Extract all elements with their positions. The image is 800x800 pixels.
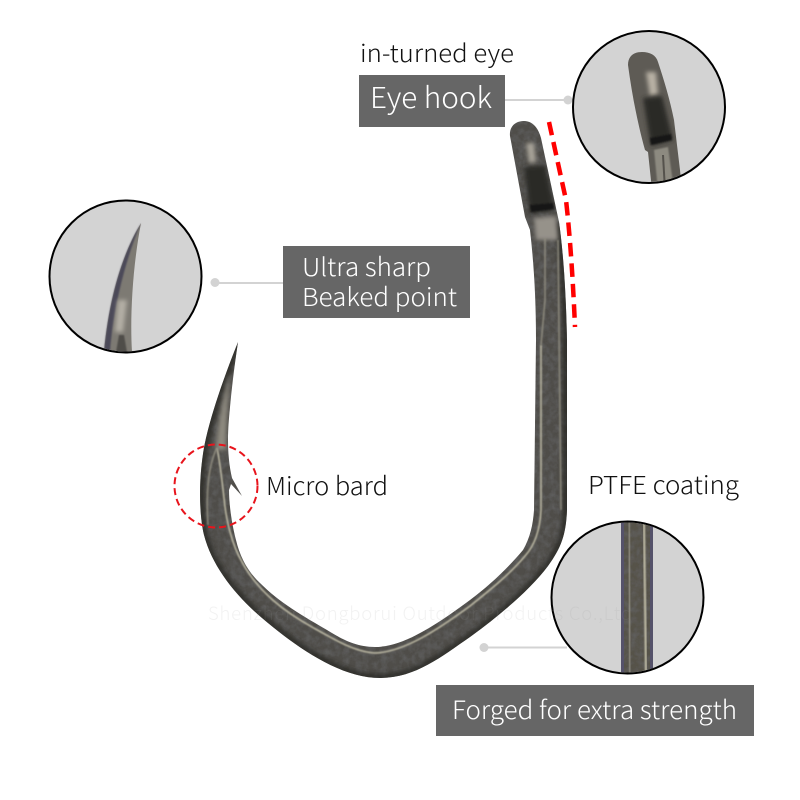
red dashed line: in-turned eye curve [549,122,575,327]
label box: Eye hook [359,75,505,127]
label: Micro bard: Micro bard [266,467,388,503]
hook outer shading [200,222,567,678]
label box: Eye hook: Eye hook [370,75,492,117]
label box: Ultra sharp Beaked point [283,246,470,318]
hook forged highlights [217,345,541,653]
connector: eye hook [505,96,572,104]
label box: Ultra sharp Beaked point: Ultra sharp [302,248,431,284]
hook eye shading [524,165,555,214]
label box: Forged for extra strength: Forged for extra strength [452,690,737,727]
magnifier: point [50,200,202,352]
label: PTFE coating: PTFE coating [588,466,739,502]
magnifier: coating [552,520,704,676]
hook illustration [190,115,575,685]
connector: beaked point [210,278,283,287]
label box: Forged for extra strength [436,685,754,736]
magnifier: eye [573,31,725,190]
red dashed circle: micro barb [174,444,258,528]
watermark: Shenzhen Dongborui Outdoor Products Co.,Ltd [208,600,632,626]
infographic: fishing hook features [48,30,754,736]
connector: forged [480,643,567,652]
label: in-turned eye: in-turned eye [360,35,514,70]
label box: Ultra sharp Beaked point: Beaked point [302,278,457,314]
